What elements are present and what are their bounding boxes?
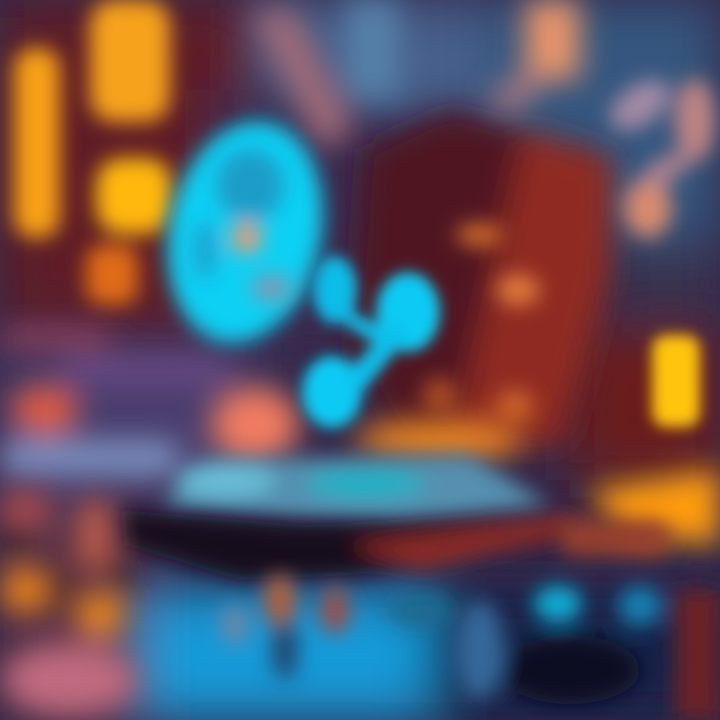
top pale streaks [250, 0, 580, 150]
right yellow window [652, 335, 700, 427]
building: dark red book shape [350, 110, 615, 445]
icon: cyan network nodes [302, 256, 440, 428]
left horizontal streaks [0, 330, 299, 476]
icon: large cyan oval [147, 107, 343, 357]
bottom right dark area with cyan spots [456, 520, 720, 720]
bottom reflections in cyan water [221, 574, 454, 680]
tablet: light top surface [160, 455, 550, 525]
building windows [422, 223, 540, 421]
right orange glow band [355, 420, 720, 545]
cyan magnifier / share icon [147, 107, 440, 428]
left orange lights [14, 0, 172, 305]
tablet: dark lower edge [120, 510, 590, 580]
icon: oval inner details [191, 149, 292, 302]
bottom left checker reflections [0, 490, 138, 716]
pale ring shape top right [601, 69, 715, 238]
